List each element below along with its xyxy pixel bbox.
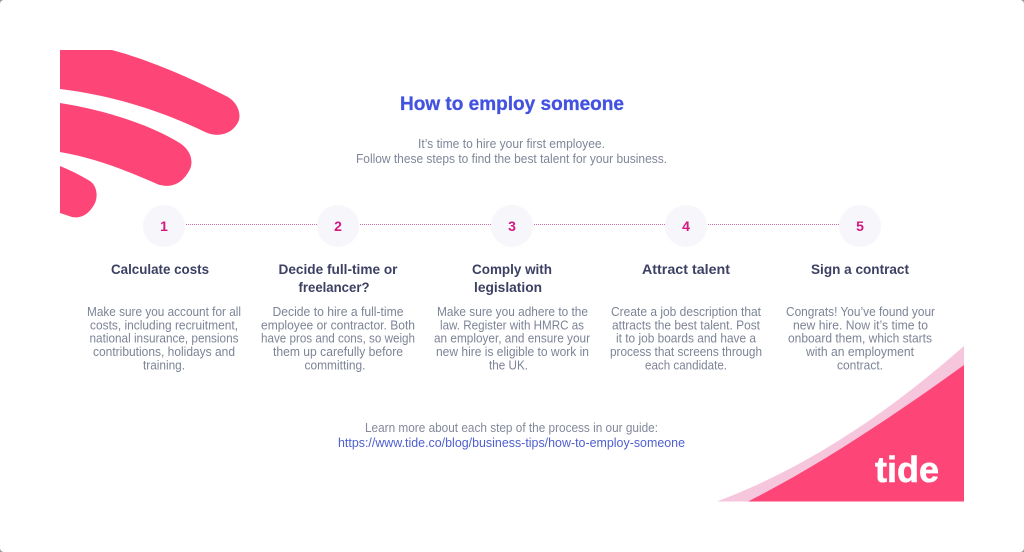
step 1: calculate costs: contributions, holidays and — [93, 345, 235, 359]
step 3: comply with legislation: an employer, and ensure your — [434, 332, 590, 346]
intro text — [356, 137, 667, 166]
step 4: attract talent: process that screens through — [610, 345, 762, 359]
title: How to employ someone — [400, 94, 624, 115]
step 3: comply with legislation: legislation — [474, 280, 542, 295]
step 5: sign a contract — [786, 262, 935, 372]
footer guide link — [338, 421, 685, 450]
step 2: decide full-time or freelancer: Decide to hire a full-time — [272, 305, 404, 319]
step timeline: 4 — [682, 218, 690, 234]
logo: tide: tide — [875, 449, 939, 490]
step 4: attract talent: Create a job description that — [611, 305, 762, 319]
footer guide link: https://www.tide.co/blog/business-tips/how-to-employ-someone — [338, 436, 685, 450]
footer guide link: Learn more about each step of the process in our guide: — [365, 421, 658, 435]
step 2: decide full-time or freelancer: Decide full-time or — [278, 262, 398, 277]
step 2: decide full-time or freelancer: freelancer? — [298, 280, 370, 295]
step timeline: 5 — [856, 218, 864, 234]
step 1: calculate costs: training. — [143, 358, 185, 372]
step 4: attract talent — [610, 262, 762, 372]
step 4: attract talent: it to job boards and have a — [616, 332, 756, 346]
step 4: attract talent: Attract talent — [642, 262, 731, 277]
step 4: attract talent: each candidate. — [645, 358, 727, 372]
step 5: sign a contract: contract. — [837, 358, 883, 372]
corner graphic: pink wedge — [717, 346, 964, 502]
step 1: calculate costs: national insurance, pensions — [90, 332, 238, 346]
intro text: Follow these steps to find the best talent for your business. — [356, 152, 667, 166]
step 5: sign a contract: Sign a contract — [811, 262, 909, 277]
step 3: comply with legislation: law. Register with HMRC as — [440, 318, 584, 332]
step timeline: 2 — [334, 218, 342, 234]
step 5: sign a contract: onboard them, which starts — [788, 332, 932, 346]
step timeline: 3 — [508, 218, 516, 234]
step 1: calculate costs — [87, 262, 241, 372]
icon: pink signal arcs top left — [60, 50, 239, 217]
step 2: decide full-time or freelancer: have pros and cons, so weigh — [261, 332, 415, 346]
step 5: sign a contract: Congrats! You’ve found your — [786, 305, 935, 319]
step 2: decide full-time or freelancer — [261, 262, 415, 372]
step 2: decide full-time or freelancer: employee or contractor. Both — [261, 318, 415, 332]
intro text: It’s time to hire your first employee. — [418, 137, 605, 151]
step 5: sign a contract: new hire. Now it’s time to — [793, 318, 928, 332]
step 3: comply with legislation: Make sure you adhere to the — [437, 305, 588, 319]
step 4: attract talent: attracts the best talent. Post — [612, 318, 760, 332]
step 1: calculate costs: Make sure you account for all — [87, 305, 241, 319]
step 1: calculate costs: costs, including recruitment, — [90, 318, 238, 332]
step 5: sign a contract: with an employment — [805, 345, 915, 359]
step 1: calculate costs: Calculate costs — [111, 262, 209, 277]
step timeline: 1 — [160, 218, 168, 234]
step timeline — [143, 205, 881, 247]
step 3: comply with legislation — [434, 262, 590, 372]
step 3: comply with legislation: Comply with — [472, 262, 552, 277]
step 3: comply with legislation: new hire is eligible to work in — [436, 345, 589, 359]
step 2: decide full-time or freelancer: committing. — [304, 358, 366, 372]
step 3: comply with legislation: the UK. — [489, 358, 528, 372]
step 2: decide full-time or freelancer: them up carefully before — [273, 345, 403, 359]
